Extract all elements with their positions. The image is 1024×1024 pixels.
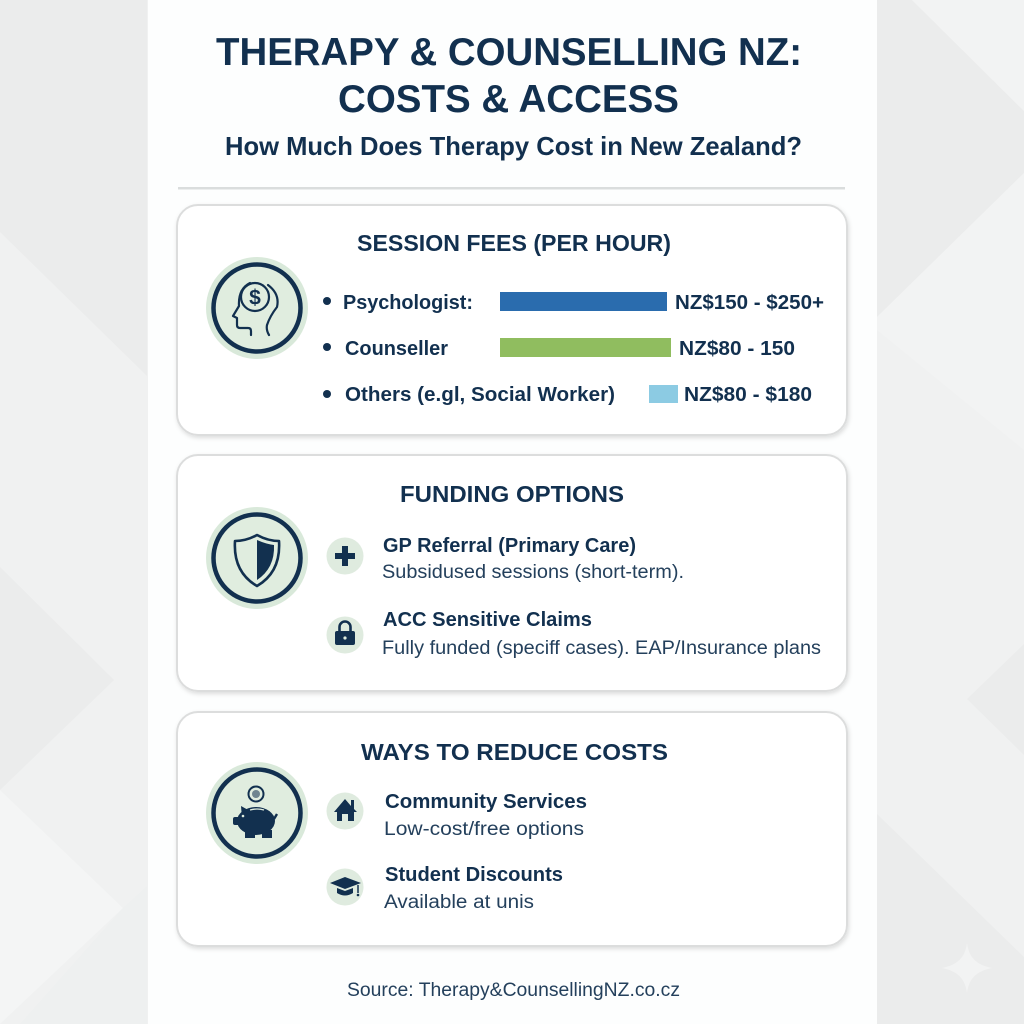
- row: psychologist: [323, 292, 824, 314]
- item: student discounts: [384, 864, 563, 913]
- item: community services: Community Services: [385, 791, 587, 813]
- icon: head with dollar: $: [249, 286, 261, 310]
- icon: padlock: [326, 616, 364, 654]
- item: gp referral: Subsidused sessions (short-term).: [382, 562, 684, 583]
- item: gp referral: GP Referral (Primary Care): [383, 535, 636, 557]
- panel: funding options: [177, 455, 847, 691]
- row: psychologist: Psychologist:: [343, 292, 473, 314]
- row: others: [323, 384, 812, 406]
- item: student discounts: Available at unis: [384, 892, 534, 913]
- row: psychologist: NZ$150 - $250+: [675, 292, 824, 314]
- item: community services: Low-cost/free options: [384, 819, 584, 840]
- icon: piggy bank: [206, 762, 308, 864]
- title: COSTS & ACCESS: [338, 78, 679, 121]
- icon: graduation cap: [326, 868, 364, 906]
- heading: session fees: SESSION FEES (PER HOUR): [357, 230, 671, 256]
- row: counseller: NZ$80 - 150: [679, 338, 795, 360]
- icon: head with dollar: [206, 257, 308, 359]
- title: THERAPY & COUNSELLING NZ:: [216, 31, 802, 74]
- subtitle: How Much Does Therapy Cost in New Zealand?: [225, 131, 802, 161]
- title: [216, 31, 802, 121]
- item: acc sensitive claims: [382, 609, 821, 659]
- item: acc sensitive claims: ACC Sensitive Claims: [383, 609, 592, 631]
- row: counseller: Counseller: [345, 338, 448, 360]
- row: others: Others (e.gl, Social Worker): [345, 384, 615, 406]
- icon: plus: [326, 538, 364, 574]
- item: student discounts: Student Discounts: [385, 864, 563, 886]
- centre page panel: [148, 0, 877, 1024]
- heading: ways to reduce costs: WAYS TO REDUCE COSTS: [361, 739, 668, 765]
- item: gp referral: [382, 535, 684, 583]
- row: others: NZ$80 - $180: [684, 384, 812, 406]
- item: community services: [384, 791, 587, 840]
- panel: session fees: [177, 205, 847, 435]
- item: acc sensitive claims: Fully funded (speciff cases). EAP/Insurance plans: [382, 638, 821, 659]
- row: counseller: [323, 338, 795, 360]
- panel: ways to reduce costs: [177, 712, 847, 946]
- heading: funding options: FUNDING OPTIONS: [400, 481, 624, 507]
- icon: shield: [206, 507, 308, 609]
- icon: house: [326, 792, 364, 830]
- source line: Source: Therapy&CounsellingNZ.co.cz: [347, 980, 680, 1001]
